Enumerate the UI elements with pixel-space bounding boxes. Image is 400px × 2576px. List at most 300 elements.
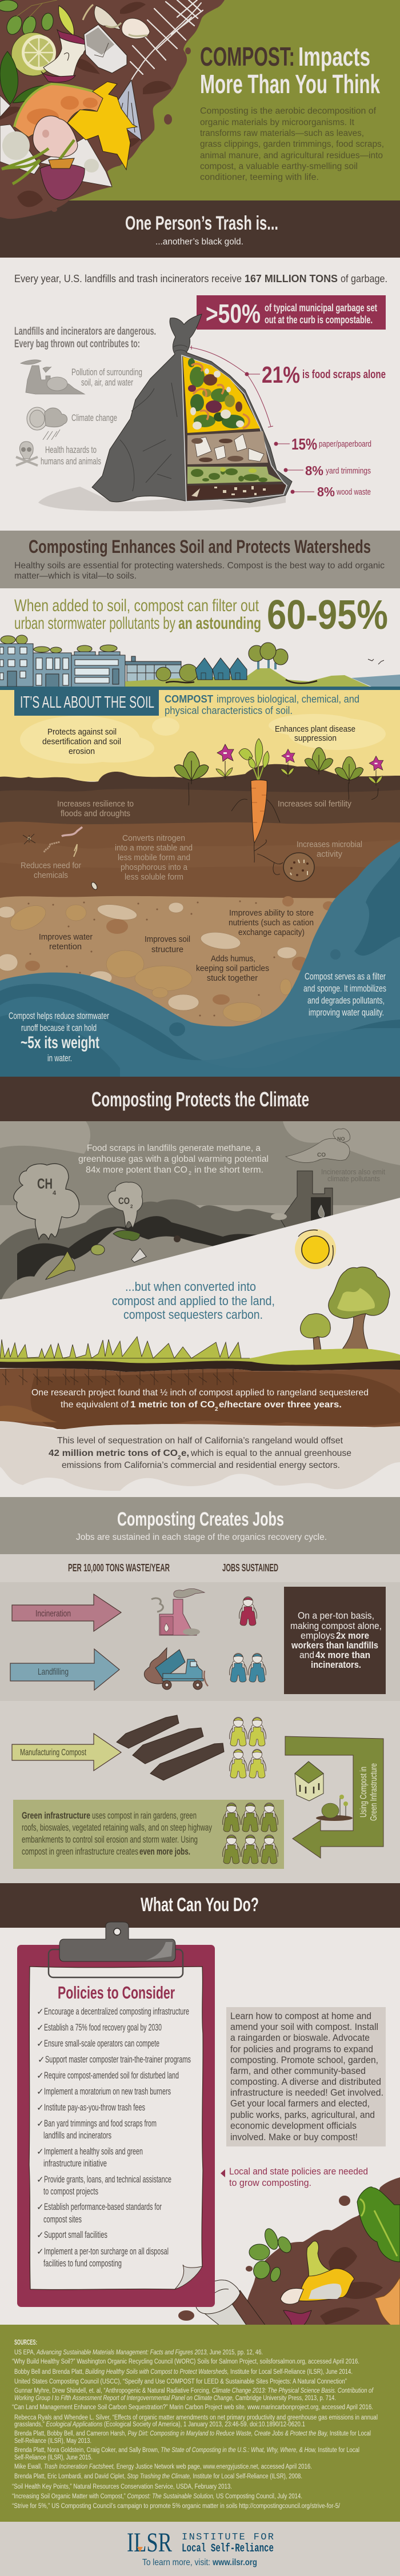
icon: skull and crossbones <box>16 442 38 466</box>
text: soil benefits in subsoil: Improves water <box>39 933 93 942</box>
text: sequesters carbon: compost sequesters carbon. <box>123 1307 263 1322</box>
callout: over 50 percent compostable <box>197 295 386 330</box>
white paper scrap <box>0 95 112 187</box>
policies checklist: ✓ <box>37 2007 44 2017</box>
panel: what you can do: economic development officials <box>230 2120 357 2131</box>
trash mound <box>0 1228 231 1311</box>
smoke: incinerator emissions <box>286 1129 350 1162</box>
arrow: manufacturing compost: Manufacturing Compost <box>20 1748 86 1758</box>
policies checklist: ✓ <box>37 2230 44 2240</box>
policies checklist: ✓ <box>37 2039 44 2049</box>
stat sentence <box>14 273 387 284</box>
intro text: animal manure, and agricultural residues—into <box>200 151 383 161</box>
stat: 60-95 percent filtering: an astounding <box>178 614 261 633</box>
panel: california rangeland: which is equal to the annual greenhouse <box>190 1449 351 1458</box>
icon: green roof building <box>295 1762 323 1801</box>
cloud: CO2: 2 <box>130 1204 133 1209</box>
panel: sources: Mike Ewall, Trash Incineration Factsheet, Energy Justice Network web page, www.energyjustice.net, accessed April 2016. <box>14 2463 312 2470</box>
heading: one person's trash: One Person’s Trash is... <box>125 212 278 234</box>
callout: local and state policies <box>221 2166 368 2188</box>
panel: california rangeland: This level of sequestration on half of California’s rangeland would offset <box>57 1436 343 1446</box>
carton <box>84 25 127 73</box>
text: soil benefits in topsoil <box>21 800 362 882</box>
icon: factory pollution <box>21 360 85 394</box>
website link: To learn more, visit: <box>142 2558 210 2567</box>
section heading: soil and watersheds: Healthy soils are essential for protecting watersheds. Compost is the best way to add organic <box>14 561 385 571</box>
text: soil benefits in subsoil: exchange capacity) <box>238 928 305 937</box>
cloud: methane CH4 <box>14 1163 79 1239</box>
illustration: compost heap with food scraps <box>0 0 225 219</box>
panel: sources: US EPA, Advancing Sustainable Materials Management: Facts and Figures 2013, June 2015, pp. 12, 46. <box>14 2349 263 2356</box>
text: dangers intro <box>14 326 156 350</box>
panel: sources: Bobby Bell and Brenda Platt, Building Healthy Soils with Compost to Protect Watersheds, Institute for Local Self-Reliance (ILSR), June 2014. <box>14 2369 353 2376</box>
lemon <box>11 33 56 76</box>
arrow: manufacturing compost <box>12 1734 121 1771</box>
panel: what you can do: Learn how to compost at home and <box>230 2011 371 2021</box>
smoke: incinerator emissions: NO <box>337 1136 345 1142</box>
soft cloud shapes <box>20 714 386 764</box>
panel: hero header <box>0 0 400 258</box>
panel: green infrastructure note: compost in green infrastructure creates <box>22 1847 138 1857</box>
arrow: using compost in green infrastructure <box>285 1736 383 1858</box>
panel: what you can do: amend your soil with compost. Install <box>230 2021 378 2032</box>
panel: sources: “Strive for 5%,” US Composting Council’s campaign to promote 5% organic matter in soils http://compostingcouncil.org/strive-for-5/ <box>12 2503 341 2510</box>
roots <box>189 783 378 874</box>
bag layer: paper <box>187 431 268 464</box>
stat: 8 percent yard <box>283 463 371 478</box>
callout: per ton jobs: making compost alone, <box>290 1620 382 1631</box>
callout: local and state policies: Local and state policies are needed <box>229 2166 368 2177</box>
text: 5x its weight: Compost helps reduce stormwater <box>9 1010 109 1021</box>
text: compost improves soil: physical characteristics of soil. <box>165 705 293 716</box>
policies checklist: ✓ <box>37 2246 44 2257</box>
text: soil benefits in subsoil: nutrients (such as cation <box>229 918 314 928</box>
fish skeleton <box>130 0 203 80</box>
panel: sources: Self-Reliance (ILSR), May 2013. <box>14 2438 91 2445</box>
stat: 21 percent food scraps: 21% <box>262 362 300 388</box>
icon: incinerator stack <box>151 1588 205 1635</box>
arrow: using compost in green infrastructure: Using Compost in <box>359 1767 369 1817</box>
text: soil benefits in subsoil: keeping soil particles <box>196 964 269 973</box>
stat: 60-95 percent filtering <box>14 592 388 638</box>
bag layer: wood waste <box>187 484 286 500</box>
stones <box>0 902 297 1010</box>
small leaves <box>249 2227 294 2283</box>
text: sequesters carbon: compost and applied to the land, <box>112 1294 275 1308</box>
stat: 60-95 percent filtering: When added to soil, compost can filter out <box>14 596 259 615</box>
worker: incineration <box>239 1597 257 1626</box>
text: compost filter and sponge <box>303 971 386 1018</box>
callout: per ton jobs: workers than landfills <box>291 1640 378 1651</box>
heading: one person's trash <box>125 212 278 247</box>
arrow: landfilling: Landfilling <box>38 1667 69 1677</box>
policies checklist: ✓ <box>37 2146 44 2157</box>
intro text: grass clippings, garden trimmings, food scraps, <box>200 139 384 149</box>
stat: 8 percent wood <box>290 484 371 499</box>
stat: 15 percent paper: 15% <box>291 435 317 453</box>
panel: what you can do: farm, and other community-based <box>230 2065 366 2076</box>
section heading: soil and watersheds <box>0 531 400 588</box>
callout: local and state policies: to grow composting. <box>229 2177 311 2188</box>
policies checklist: ✓ <box>37 2174 44 2185</box>
chart column headings: PER 10,000 TONS WASTE/YEAR <box>68 1562 170 1574</box>
logo wordmark: Local Self-Reliance <box>182 2542 274 2555</box>
text: soil benefits in topsoil: Converts nitrogen <box>122 834 185 843</box>
text: 5x its weight: in water. <box>47 1053 72 1064</box>
panel: california rangeland: e, <box>181 1449 189 1458</box>
title: Impacts <box>298 42 370 71</box>
stat: 8 percent yard: 8% <box>305 463 323 478</box>
stat: 60-95 percent filtering: urban stormwater pollutants by <box>14 614 175 633</box>
policies checklist: Establish performance-based standards for <box>44 2202 162 2212</box>
panel: green infrastructure note <box>13 1800 284 1869</box>
policies checklist: infrastructure initiative <box>43 2158 107 2169</box>
text: sequesters carbon: ...but when converted into <box>125 1279 256 1294</box>
text: research project: 2 <box>215 1406 218 1413</box>
paper cup <box>195 2280 266 2326</box>
houses <box>195 658 247 680</box>
website link <box>142 2558 257 2567</box>
text: soil benefits in topsoil: less mobile form and <box>118 853 190 862</box>
callout: bracket arc <box>190 346 273 427</box>
arrow: incineration <box>12 1594 121 1631</box>
text: incinerators note: Incinerators also emit <box>321 1168 385 1176</box>
soil heading box <box>14 689 159 716</box>
panel: sources: SOURCES: <box>14 2338 37 2346</box>
panel: landfill emissions scene <box>0 1121 400 1311</box>
policies checklist: Provide grants, loans, and technical assistance <box>44 2174 171 2185</box>
panel: sources: Brenda Platt, Eric Lombardi, and David Ciplet, Stop Trashing the Climate, Institute for Local Self-Reliance (ILSR), 2008. <box>14 2473 302 2480</box>
panel: compost sequesters carbon <box>0 1198 400 1429</box>
yellow maple leaf <box>67 82 137 170</box>
panel: it's all about the soil <box>0 689 400 2576</box>
policies checklist: ✓ <box>38 2055 45 2065</box>
workers: landfilling <box>230 1653 266 1682</box>
panel: what you can do: composting. A diverse and distributed <box>230 2076 381 2087</box>
text: health hazards: Health hazards to <box>45 444 97 455</box>
bag layer: food scraps <box>183 356 260 433</box>
arrow: landfilling <box>10 1649 119 1690</box>
logo wordmark: INSTITUTE FOR <box>182 2532 274 2543</box>
text: soil benefits in topsoil: less soluble form <box>125 873 183 882</box>
cloud: CO2 <box>108 1182 143 1228</box>
cloud: methane CH4: 4 <box>53 1190 57 1197</box>
intro text: organic materials by microorganisms. It <box>200 118 355 127</box>
policies checklist: Ban yard trimmings and food scraps from <box>44 2118 157 2129</box>
illustration: green city skyline <box>0 635 400 690</box>
yellow leaf <box>59 6 74 35</box>
panel: what you can do: involved. Make or buy compost! <box>230 2132 358 2142</box>
soil with roots <box>0 1368 400 1429</box>
panel: sources: United States Composting Council (USCC), “Specify and Use COMPOST for LEED & Sustainable Sites Projects: A Natural Connection” <box>14 2378 347 2385</box>
text: soil benefits in topsoil: phosphorous into a <box>121 863 188 872</box>
intro text: conditioner, teeming with life. <box>200 172 319 182</box>
flower <box>2 116 85 200</box>
text: soil benefits above ground: Protects against soil <box>47 728 117 737</box>
stat: 8 percent wood: wood waste <box>336 487 371 497</box>
squash stem <box>307 2241 330 2281</box>
text: soil benefits above ground: suppression <box>294 734 337 743</box>
paper sheet <box>29 1967 203 2290</box>
text: soil benefits in subsoil: stuck together <box>207 974 258 983</box>
callout: per ton jobs: incinerators. <box>311 1659 361 1670</box>
text: methane explanation: 84x more potent than CO <box>86 1165 187 1175</box>
arrow: using compost in green infrastructure: Green Infrastructure <box>369 1763 379 1821</box>
panel: sources: Self-Reliance (ILSR), June 2015. <box>14 2454 93 2461</box>
text: soil benefits in topsoil: Increases soil fertility <box>278 800 352 809</box>
panel: green infrastructure note: even more jobs. <box>139 1847 190 1857</box>
text: 5x its weight <box>9 1010 109 1064</box>
policies checklist: Support master composter train-the-trainer programs <box>45 2055 191 2065</box>
illustration: compost pile bottom right <box>178 2177 400 2326</box>
policies checklist: Establish a 75% food recovery goal by 2030 <box>44 2023 162 2033</box>
soil heading box: IT’S ALL ABOUT THE SOIL <box>20 693 154 712</box>
text: methane explanation: Food scraps in landfills generate methane, a <box>87 1143 261 1153</box>
callout: per ton jobs <box>284 1587 386 1694</box>
logo mark: ILSR <box>127 2527 172 2558</box>
panel: sources: Working Group I to Fifth Assessment Report of Intergovernmental Panel on Climate Change, Cambridge University Press, 2013, p. 714. <box>14 2395 336 2402</box>
text: soil benefits in subsoil: Adds humus, <box>211 954 255 964</box>
text: sequesters carbon <box>112 1279 275 1322</box>
footer: ILSR logo <box>0 2522 400 2576</box>
policies checklist: compost sites <box>43 2214 82 2225</box>
policies checklist <box>37 2007 191 2269</box>
carrot <box>239 739 269 843</box>
stat: 21 percent food scraps <box>245 362 386 388</box>
text: pollution: soil, air, and water <box>81 377 133 388</box>
stat: 8 percent yard: yard trimmings <box>326 466 371 476</box>
policies checklist: Ensure small-scale operators can compete <box>44 2039 159 2049</box>
text: research project: e/hectare over three years. <box>219 1400 342 1410</box>
policies heading: Policies to Consider <box>58 1983 175 2003</box>
dark green leaf <box>0 51 50 104</box>
text: health hazards <box>41 444 101 467</box>
smoke: incinerator emissions: CO <box>317 1152 326 1158</box>
panel: california rangeland: 2 <box>178 1455 181 1461</box>
section heading: jobs: Composting Creates Jobs <box>117 1508 284 1530</box>
callout: per ton jobs: employs <box>301 1630 335 1641</box>
panel: what you can do <box>226 2007 386 2146</box>
text: pollution <box>71 367 142 388</box>
text: soil benefits in topsoil: Increases microbial <box>297 840 362 849</box>
panel: sources: Gunnar Myhre, Drew Shindell, et. al, “Anthropogenic & Natural Radiative Forcing, Climate Change 2013: The Physical Science Basis. Contribution of <box>14 2388 374 2394</box>
text: 5x its weight: ~5x its weight <box>21 1033 99 1052</box>
policies checklist: Implement a per-ton surcharge on all disposal <box>44 2246 169 2257</box>
text: soil benefits above ground: Enhances plant disease <box>275 725 355 734</box>
section heading: jobs <box>0 1497 400 1554</box>
text: dangers intro: Landfills and incinerators are dangerous. <box>14 326 156 338</box>
panel: california rangeland <box>0 1421 400 1499</box>
text: soil benefits above ground <box>42 725 355 756</box>
panel: what you can do: infrastructure is needed! Get involved. <box>230 2087 383 2098</box>
illustration: garbage bag cross-section <box>38 314 292 511</box>
text: research project: One research project found that ½ inch of compost applied to rangeland sequestered <box>31 1388 369 1398</box>
chart column headings: JOBS SUSTAINED <box>222 1562 278 1574</box>
panel: what you can do: public works, parks, agricultural, and <box>230 2109 375 2120</box>
policies checklist: ✓ <box>37 2023 44 2033</box>
logo wordmark <box>182 2532 274 2555</box>
trees <box>258 657 275 669</box>
stat sentence: 167 MILLION TONS <box>245 273 338 284</box>
policies checklist: ✓ <box>37 2202 44 2212</box>
text: research project: the equivalent of <box>61 1400 129 1410</box>
panel: green infrastructure note: uses compost in rain gardens, green <box>92 1811 197 1821</box>
callout: per ton jobs: On a per-ton basis, <box>298 1610 374 1621</box>
panel: sources: grasslands,” Ecological Applications (Ecological Society of America), 1 January 2013, 23:46-59. doi:10.1890/12-0620.1 <box>14 2421 305 2428</box>
text: soil benefits in topsoil: Reduces need for <box>21 861 81 870</box>
plants above ground <box>23 739 383 890</box>
icon: small tree <box>301 1314 330 1355</box>
stat sentence: of garbage. <box>341 273 387 284</box>
policies checklist: Institute pay-as-you-throw trash fees <box>44 2102 145 2113</box>
text: soil benefits above ground: erosion <box>69 747 95 756</box>
intro text: Composting is the aerobic decomposition of <box>200 106 377 116</box>
cloud: methane CH4: CH <box>37 1176 53 1192</box>
text: methane explanation <box>78 1143 269 1176</box>
text: soil benefits in topsoil: Increases resilience to <box>57 800 134 809</box>
text: soil benefits in subsoil: Improves ability to store <box>229 909 314 918</box>
bag layer: yard trimmings <box>187 467 283 484</box>
panel: policies clipboard <box>17 1922 215 2307</box>
roof gardens <box>1 635 117 653</box>
soil creatures <box>23 827 98 890</box>
microbes <box>283 853 314 881</box>
text: 5x its weight: runoff because it can hold <box>21 1022 97 1033</box>
policies checklist: Implement a moratorium on new trash burners <box>44 2087 171 2097</box>
icon: big tree <box>329 1267 390 1356</box>
text: soil benefits above ground: desertification and soil <box>42 737 121 747</box>
fish tail <box>103 80 142 141</box>
section heading: what can you do: What Can You Do? <box>141 1894 259 1916</box>
section heading: jobs: Jobs are sustained in each stage of the organics recovery cycle. <box>76 1532 327 1542</box>
panel: green infrastructure note: embankments to control soil erosion and storm water. Using <box>22 1835 198 1845</box>
text: compost improves soil <box>165 693 359 716</box>
icon: incinerator <box>271 1171 333 1228</box>
heading: one person's trash: ...another’s black gold. <box>155 237 243 247</box>
policies checklist: Require compost-amended soil for disturbed land <box>44 2071 179 2081</box>
text: research project: 1 metric ton of CO <box>130 1400 215 1410</box>
section heading: climate <box>0 1077 400 1121</box>
orange squash <box>14 84 105 137</box>
text: methane explanation: 2 <box>189 1170 191 1176</box>
text: methane explanation: in the short term. <box>194 1165 263 1175</box>
metal clip <box>49 1922 183 1977</box>
grass and land <box>0 1337 400 1372</box>
green verge <box>125 668 370 687</box>
panel: sources: Brenda Platt, Bobby Bell, and Cameron Harsh, Pay Dirt: Composting in Maryland to Reduce Waste, Create Jobs & Protect the Bay, Institute for Local <box>14 2430 371 2437</box>
policies checklist: ✓ <box>37 2102 44 2113</box>
text: pollution: Pollution of surrounding <box>71 367 142 378</box>
text: compost improves soil: COMPOST <box>165 693 213 705</box>
text: soil benefits in topsoil: activity <box>317 850 343 859</box>
stat: 15 percent paper <box>274 435 371 453</box>
water: stormwater flowing around soil <box>0 841 400 1080</box>
bushes <box>156 664 198 681</box>
policies checklist: Support small facilities <box>44 2230 107 2240</box>
policies checklist: landfills and incinerators <box>43 2130 111 2141</box>
arrow: incineration: Incineration <box>35 1609 71 1619</box>
text: soil benefits in topsoil: chemicals <box>34 871 68 880</box>
apple core <box>41 30 90 82</box>
callout: per ton jobs: 4x more than <box>315 1650 370 1660</box>
icon: climate storm cloud <box>27 407 67 440</box>
dark smoke mounds <box>0 1199 337 1302</box>
text: research project <box>31 1388 369 1413</box>
text: compost improves soil: improves biological, chemical, and <box>217 693 359 705</box>
stat: 15 percent paper: paper/paperboard <box>319 439 371 449</box>
icon: dump truck <box>144 1648 208 1690</box>
text: climate change: Climate change <box>71 412 117 423</box>
panel: garbage statistics <box>14 273 387 511</box>
panel: green infrastructure note: Green infrastructure <box>22 1811 90 1821</box>
icon: compost windrows <box>117 1715 224 1780</box>
section heading: what can you do <box>0 1883 400 1928</box>
policies checklist: ✓ <box>37 2087 44 2097</box>
policies checklist: ✓ <box>37 2118 44 2129</box>
intro text <box>200 106 384 182</box>
cloud: CO2: CO <box>118 1195 130 1206</box>
policies checklist: Encourage a decentralized composting infrastructure <box>44 2007 189 2017</box>
callout: per ton jobs: 2x more <box>336 1630 369 1641</box>
policies checklist: facilities to fund composting <box>43 2258 122 2269</box>
workers: green infrastructure <box>223 1803 278 1864</box>
intro text: transforms raw materials—such as leaves, <box>200 129 364 138</box>
text: dangers intro: Every bag thrown out contributes to: <box>14 338 140 350</box>
panel: sources <box>0 2325 400 2522</box>
stat: 8 percent wood: 8% <box>317 484 335 499</box>
panel: jobs chart <box>0 1554 400 1883</box>
panel: sources: “Increasing Soil Organic Matter with Compost,” Compost: The Sustainable Solution, US Composting Council, July 2014. <box>12 2493 302 2500</box>
panel: what you can do: Get your local farmers and elected, <box>230 2098 370 2109</box>
title: COMPOST: <box>200 42 295 71</box>
beet scrap <box>283 2310 311 2326</box>
text: soil benefits in topsoil: floods and droughts <box>61 809 130 818</box>
panel: what you can do: a raingarden or bioswale. Advocate <box>230 2032 370 2043</box>
leaves top left <box>0 0 57 37</box>
panel: what you can do: for policies and programs to expand <box>230 2044 373 2055</box>
text: health hazards: humans and animals <box>41 456 101 467</box>
orange leaf <box>375 2277 400 2326</box>
panel: sources: “Soil Health Key Points,” Natural Resources Conservation Service, USDA, February 2013. <box>12 2483 232 2490</box>
text: soil benefits in subsoil: retention <box>49 942 82 952</box>
panel: sources: Brenda Platt, Nora Goldstein, Craig Coker, and Sally Brown, The State of Composting in the U.S.: What, Why, Where, & How, Institute for Local <box>14 2447 359 2454</box>
text: methane explanation: greenhouse gas with a global warming potential <box>78 1154 269 1164</box>
icon: rain garden <box>316 1795 353 1821</box>
text: soil benefits in subsoil: Improves soil <box>145 935 190 944</box>
oak leaf <box>357 2187 400 2262</box>
callout: per ton jobs: and <box>299 1650 314 1660</box>
soil layers <box>0 764 400 1080</box>
text: incinerators note <box>321 1168 385 1183</box>
panel: what you can do: composting. Promote school, garden, <box>230 2055 378 2065</box>
workers: manufacturing <box>230 1717 266 1778</box>
website link: www.ilsr.org <box>212 2558 257 2567</box>
panel: california rangeland: emissions from California’s commercial and residential energy sectors. <box>62 1460 340 1470</box>
panel: california rangeland: 42 million metric tons of CO <box>49 1449 178 1458</box>
egg shell <box>281 2288 303 2304</box>
title <box>200 42 380 99</box>
egg shell <box>94 6 150 39</box>
policies checklist: Implement a healthy soils and green <box>44 2146 143 2157</box>
panel: green infrastructure note: roofs, bioswales, vegetated retaining walls, and on steep highway <box>22 1823 213 1833</box>
icon: sun <box>295 1229 336 1269</box>
text: soil benefits in subsoil <box>39 909 314 983</box>
section band: one person's trash <box>0 200 400 258</box>
text: incinerators note: climate pollutants <box>327 1175 380 1183</box>
policies checklist: ✓ <box>37 2071 44 2081</box>
intro text: compost, a valuable earthy-smelling soil <box>200 162 358 171</box>
policies checklist: to compost projects <box>43 2186 98 2197</box>
